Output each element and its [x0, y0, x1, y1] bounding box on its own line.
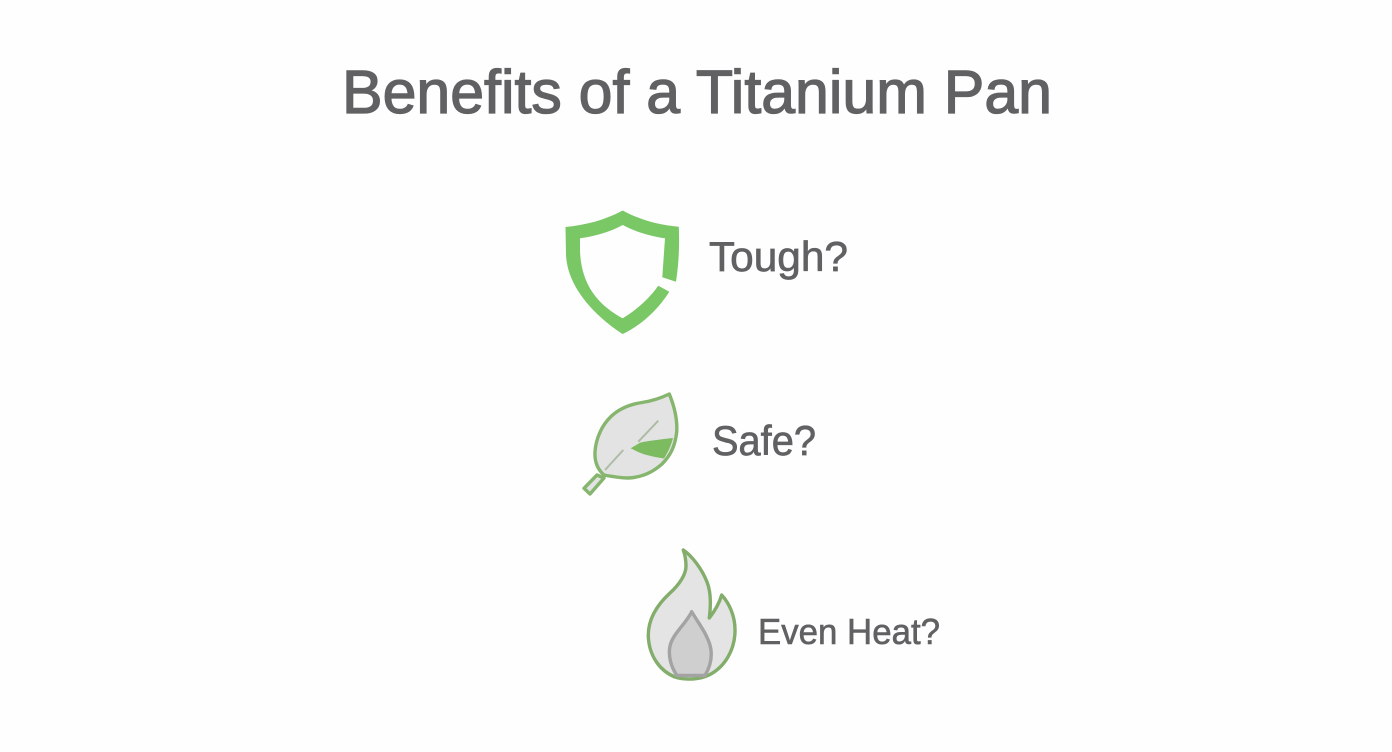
icon: leaf [584, 394, 677, 494]
label: safe: Safe? [712, 417, 816, 464]
label: tough: Tough? [709, 233, 848, 280]
benefit: safe [584, 394, 816, 494]
benefit: even heat [648, 550, 940, 679]
benefit: tough [566, 210, 848, 334]
icon: flame [648, 550, 735, 679]
icon: shield [566, 210, 679, 334]
title: Benefits of a Titanium Pan [342, 58, 1052, 126]
label: even heat: Even Heat? [758, 611, 940, 652]
